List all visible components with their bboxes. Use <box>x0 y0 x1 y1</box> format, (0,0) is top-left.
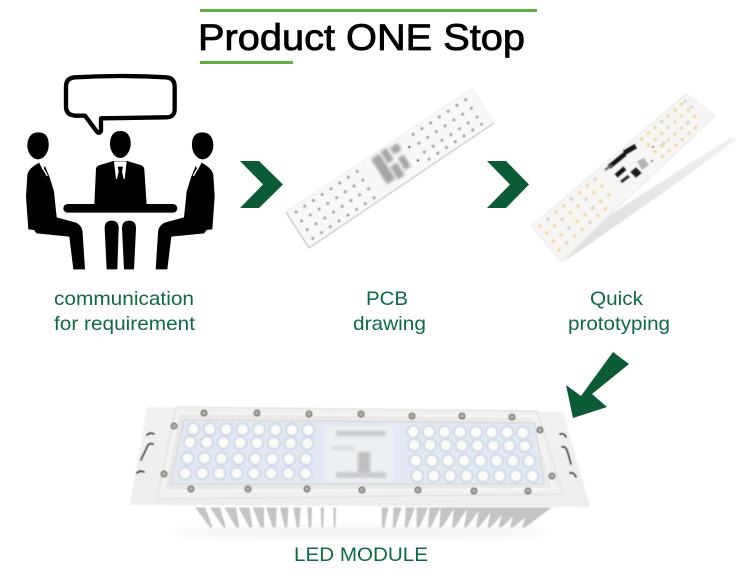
left LED lenses <box>185 429 309 473</box>
label: communication: for requirement <box>54 313 196 335</box>
label: PCB drawing: PCB <box>366 288 408 310</box>
heat sink fins <box>170 507 552 538</box>
screws <box>161 410 555 494</box>
mounting plate <box>130 407 590 507</box>
icon: meeting of three people <box>26 76 215 269</box>
mounting holes <box>137 433 576 477</box>
label: quick prototyping: Quick <box>590 288 643 310</box>
label: PCB drawing <box>353 288 426 335</box>
label: communication <box>54 288 196 335</box>
label: LED MODULE: LED MODULE <box>294 544 428 566</box>
image: LED module <box>130 407 590 538</box>
arrow: chevron 1 <box>240 161 283 208</box>
label: PCB drawing: drawing <box>353 313 426 335</box>
inner frame <box>157 407 563 499</box>
image: assembled LED PCB prototype <box>532 94 737 262</box>
label: communication: communication <box>54 288 194 310</box>
right LED lenses <box>413 432 533 476</box>
arrow: down-left to module <box>566 352 629 418</box>
title <box>198 9 537 64</box>
label: quick prototyping: prototyping <box>568 313 670 335</box>
lens glass <box>170 420 544 484</box>
title: Product ONE Stop <box>198 16 525 58</box>
central label <box>325 426 393 482</box>
image: bare PCB board <box>286 89 494 248</box>
arrow: chevron 2 <box>487 161 529 208</box>
label: quick prototyping <box>568 288 670 335</box>
